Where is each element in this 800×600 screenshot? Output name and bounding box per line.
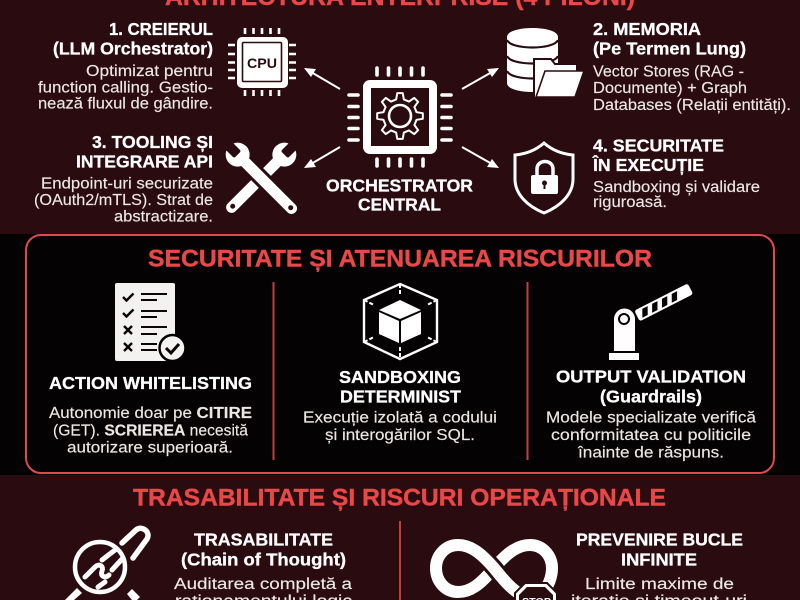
arrow: to securitate xyxy=(462,147,499,168)
text block: action whitelisting: autorizare superioară. xyxy=(67,440,233,456)
text block: pillar 4 securitate: ÎN EXECUȚIE xyxy=(592,154,704,175)
text block: sandboxing determinist: Execuție izolată a codului xyxy=(303,410,497,426)
icon: cpu chip: CPU xyxy=(247,55,277,71)
text block: sandboxing determinist: DETERMINIST xyxy=(340,386,461,406)
text block: pillar 2 memoria: Documente) + Graph xyxy=(593,80,747,97)
text block: pillar 1 creierul: 1. CREIERUL xyxy=(109,19,213,39)
text block: pillar 1 creierul xyxy=(38,19,213,112)
arrow: to creierul xyxy=(304,68,340,89)
text block: output validation: (Guardrails) xyxy=(600,386,702,406)
text block: sandboxing determinist xyxy=(303,367,497,444)
text block: pillar 4 securitate: riguroasă. xyxy=(593,194,667,211)
label: orchestrator central: ORCHESTRATOR xyxy=(326,176,473,196)
icon: barrier gate xyxy=(609,283,693,360)
text block: trasabilitate xyxy=(174,530,352,600)
text block: pillar 2 memoria: Vector Stores (RAG - xyxy=(593,64,744,80)
text block: prevenire bucle infinite: Limite maxime de xyxy=(585,576,734,593)
text block: trasabilitate: (Chain of Thought) xyxy=(181,550,346,570)
icon: infinity loop with stop sign xyxy=(436,545,557,600)
heading: trasabilitate si riscuri: TRASABILITATE ȘI RISCURI OPERAȚIONALE xyxy=(133,484,666,512)
text block: pillar 1 creierul: function calling. Gestio- xyxy=(38,80,213,96)
text block: pillar 2 memoria: 2. MEMORIA xyxy=(593,19,701,39)
label: orchestrator central xyxy=(326,176,473,214)
text block: pillar 3 tooling: Endpoint-uri securizate xyxy=(41,176,213,192)
text block: output validation: înainte de răspuns. xyxy=(577,444,724,462)
text block: pillar 4 securitate xyxy=(592,136,760,211)
text block: prevenire bucle infinite: INFINITE xyxy=(621,550,697,570)
text block: output validation: OUTPUT VALIDATION xyxy=(556,366,746,386)
text block: output validation: conformitatea cu politicile xyxy=(551,427,751,444)
heading: securitate: SECURITATE ȘI ATENUAREA RISCURILOR xyxy=(148,246,652,272)
icon: magnifier over chain xyxy=(65,528,148,600)
text block: sandboxing determinist: și interogărilor SQL. xyxy=(325,427,475,444)
text block: pillar 1 creierul: Optimizat pentru xyxy=(86,63,213,80)
icon: sandbox cube xyxy=(364,284,437,359)
text block: prevenire bucle infinite: PREVENIRE BUCLE xyxy=(576,530,743,550)
text block: pillar 3 tooling xyxy=(34,132,213,226)
text block: pillar 4 securitate: Sandboxing și validare xyxy=(593,179,760,196)
text block: pillar 2 memoria xyxy=(593,19,791,114)
text block: action whitelisting: (GET). SCRIEREA necesită xyxy=(53,422,248,440)
text block: sandboxing determinist: SANDBOXING xyxy=(339,367,461,387)
icon: shield with lock xyxy=(515,143,573,213)
icon: crossed wrenches xyxy=(217,134,305,222)
text block: action whitelisting xyxy=(49,373,252,456)
text block: pillar 3 tooling: abstractizare. xyxy=(114,208,213,226)
icon: checklist xyxy=(115,283,186,361)
arrow: to tooling xyxy=(304,147,340,168)
text block: trasabilitate: TRASABILITATE xyxy=(194,530,333,550)
icon: central chip with gear xyxy=(349,68,451,166)
text block: trasabilitate: Auditarea completă a xyxy=(174,576,352,593)
text block: pillar 1 creierul: nează fluxul de gândire. xyxy=(38,96,213,112)
text block: pillar 4 securitate: 4. SECURITATE xyxy=(593,136,724,156)
text block: pillar 2 memoria: (Pe Termen Lung) xyxy=(593,38,746,58)
text block: output validation: Modele specializate verifică xyxy=(546,410,756,426)
panel: securitate si atenuarea riscurilor xyxy=(26,235,774,473)
text block: pillar 2 memoria: Databases (Relații entități). xyxy=(593,97,791,114)
text block: pillar 1 creierul: (LLM Orchestrator) xyxy=(53,38,213,58)
icon: database with folder xyxy=(507,28,584,98)
text block: action whitelisting: ACTION WHITELISTING xyxy=(49,373,252,393)
text block: action whitelisting: Autonomie doar pe CITIRE xyxy=(49,405,252,422)
text block: pillar 3 tooling: (OAuth2/mTLS). Strat de xyxy=(34,192,213,209)
arrow: to memoria xyxy=(462,68,499,89)
text block: prevenire bucle infinite xyxy=(571,530,747,600)
text block: pillar 3 tooling: 3. TOOLING ȘI xyxy=(92,132,213,152)
icon: cpu chip xyxy=(228,28,296,96)
label: orchestrator central: CENTRAL xyxy=(358,194,441,214)
text block: output validation xyxy=(546,366,756,462)
text block: pillar 3 tooling: INTEGRARE API xyxy=(76,152,213,172)
